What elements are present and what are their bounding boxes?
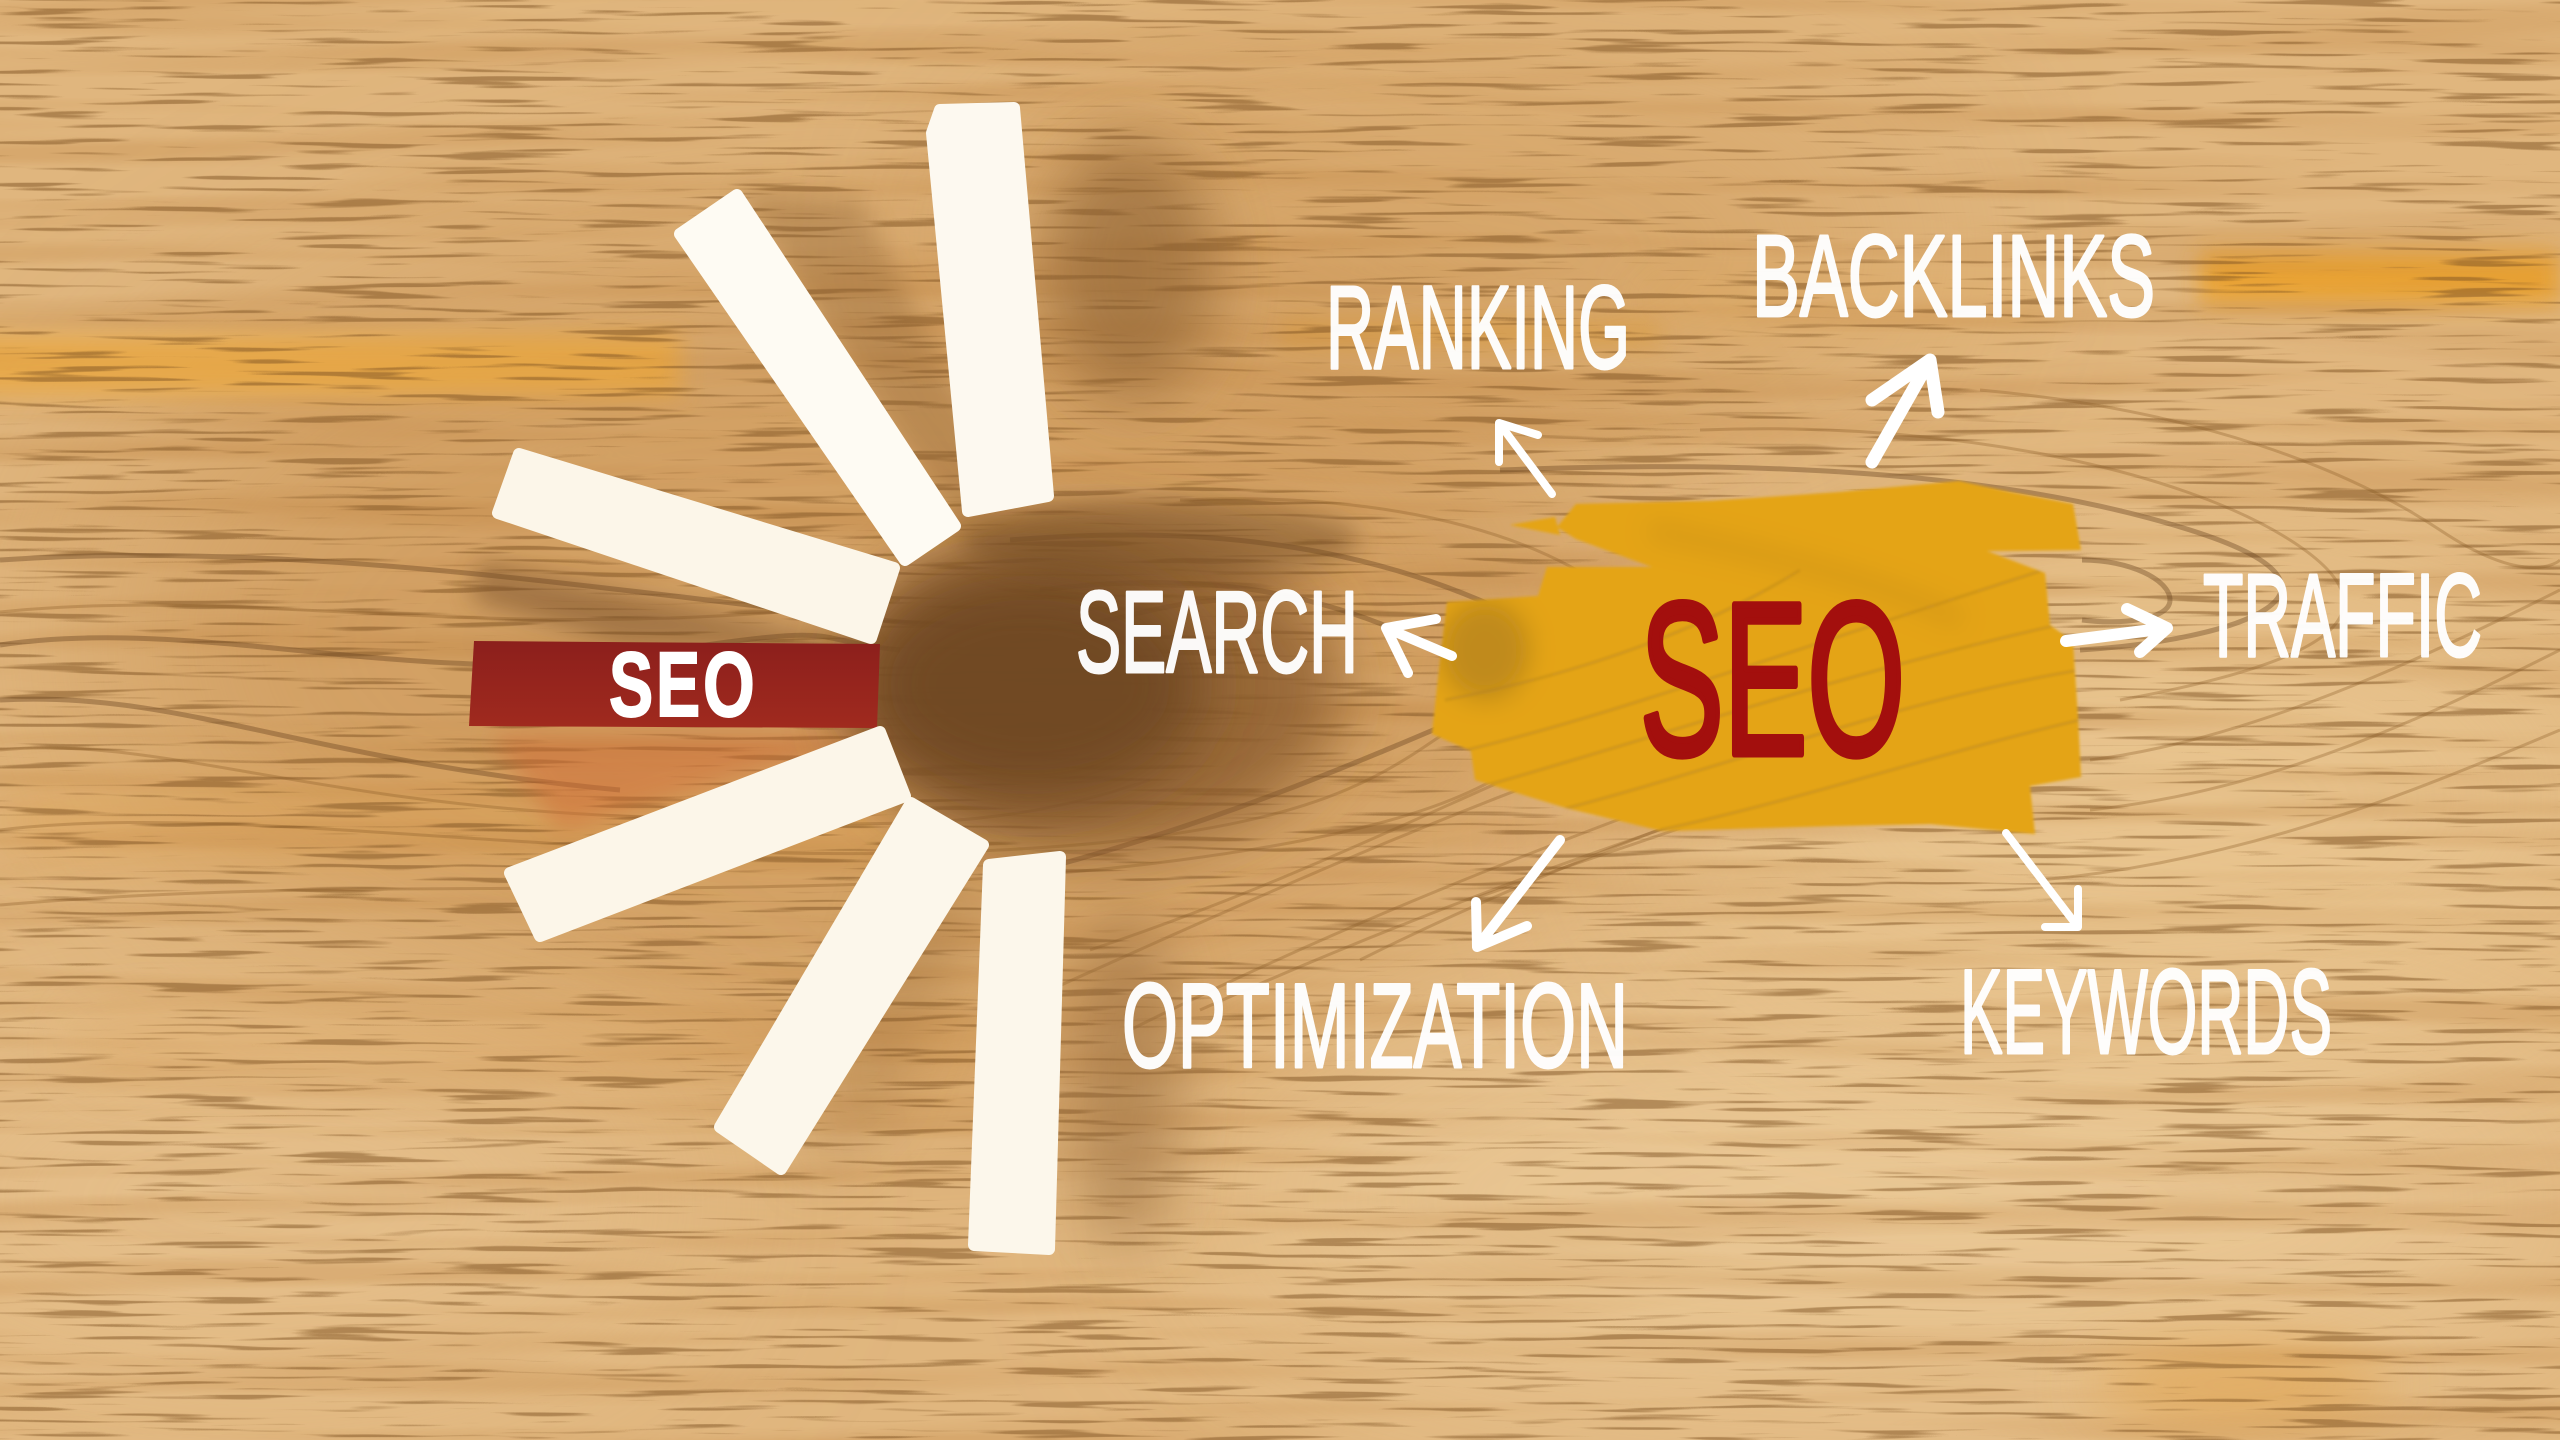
white block: lower diagonal xyxy=(720,803,983,1169)
centre SEO heading: SEO xyxy=(1640,558,1905,800)
arrow: to keywords xyxy=(2006,833,2078,927)
block shadows xyxy=(470,140,1360,1250)
arrow: to backlinks xyxy=(1872,360,1938,462)
wood grain knots and lines xyxy=(0,390,2560,1030)
arrow: to traffic xyxy=(2066,609,2167,652)
label: RANKING: RANKING xyxy=(1326,262,1630,394)
white block: bottom vertical xyxy=(974,857,1060,1249)
yellow paint brush stroke xyxy=(1432,481,2081,834)
white block: lower long xyxy=(510,732,905,936)
white block: upper long xyxy=(498,454,894,638)
red block with SEO label xyxy=(469,632,880,736)
white block: top vertical xyxy=(932,108,1048,511)
arrow: to ranking xyxy=(1499,423,1552,494)
red block with SEO label: SEO xyxy=(609,632,758,736)
label: SEARCH: SEARCH xyxy=(1076,567,1358,697)
label: BACKLINKS: BACKLINKS xyxy=(1752,211,2155,341)
domino blocks xyxy=(469,108,1060,1249)
arrow: to optimization xyxy=(1476,840,1560,947)
white block: upper diagonal xyxy=(680,195,955,560)
label: OPTIMIZATION: OPTIMIZATION xyxy=(1122,959,1628,1093)
arrow: to search xyxy=(1386,619,1452,673)
